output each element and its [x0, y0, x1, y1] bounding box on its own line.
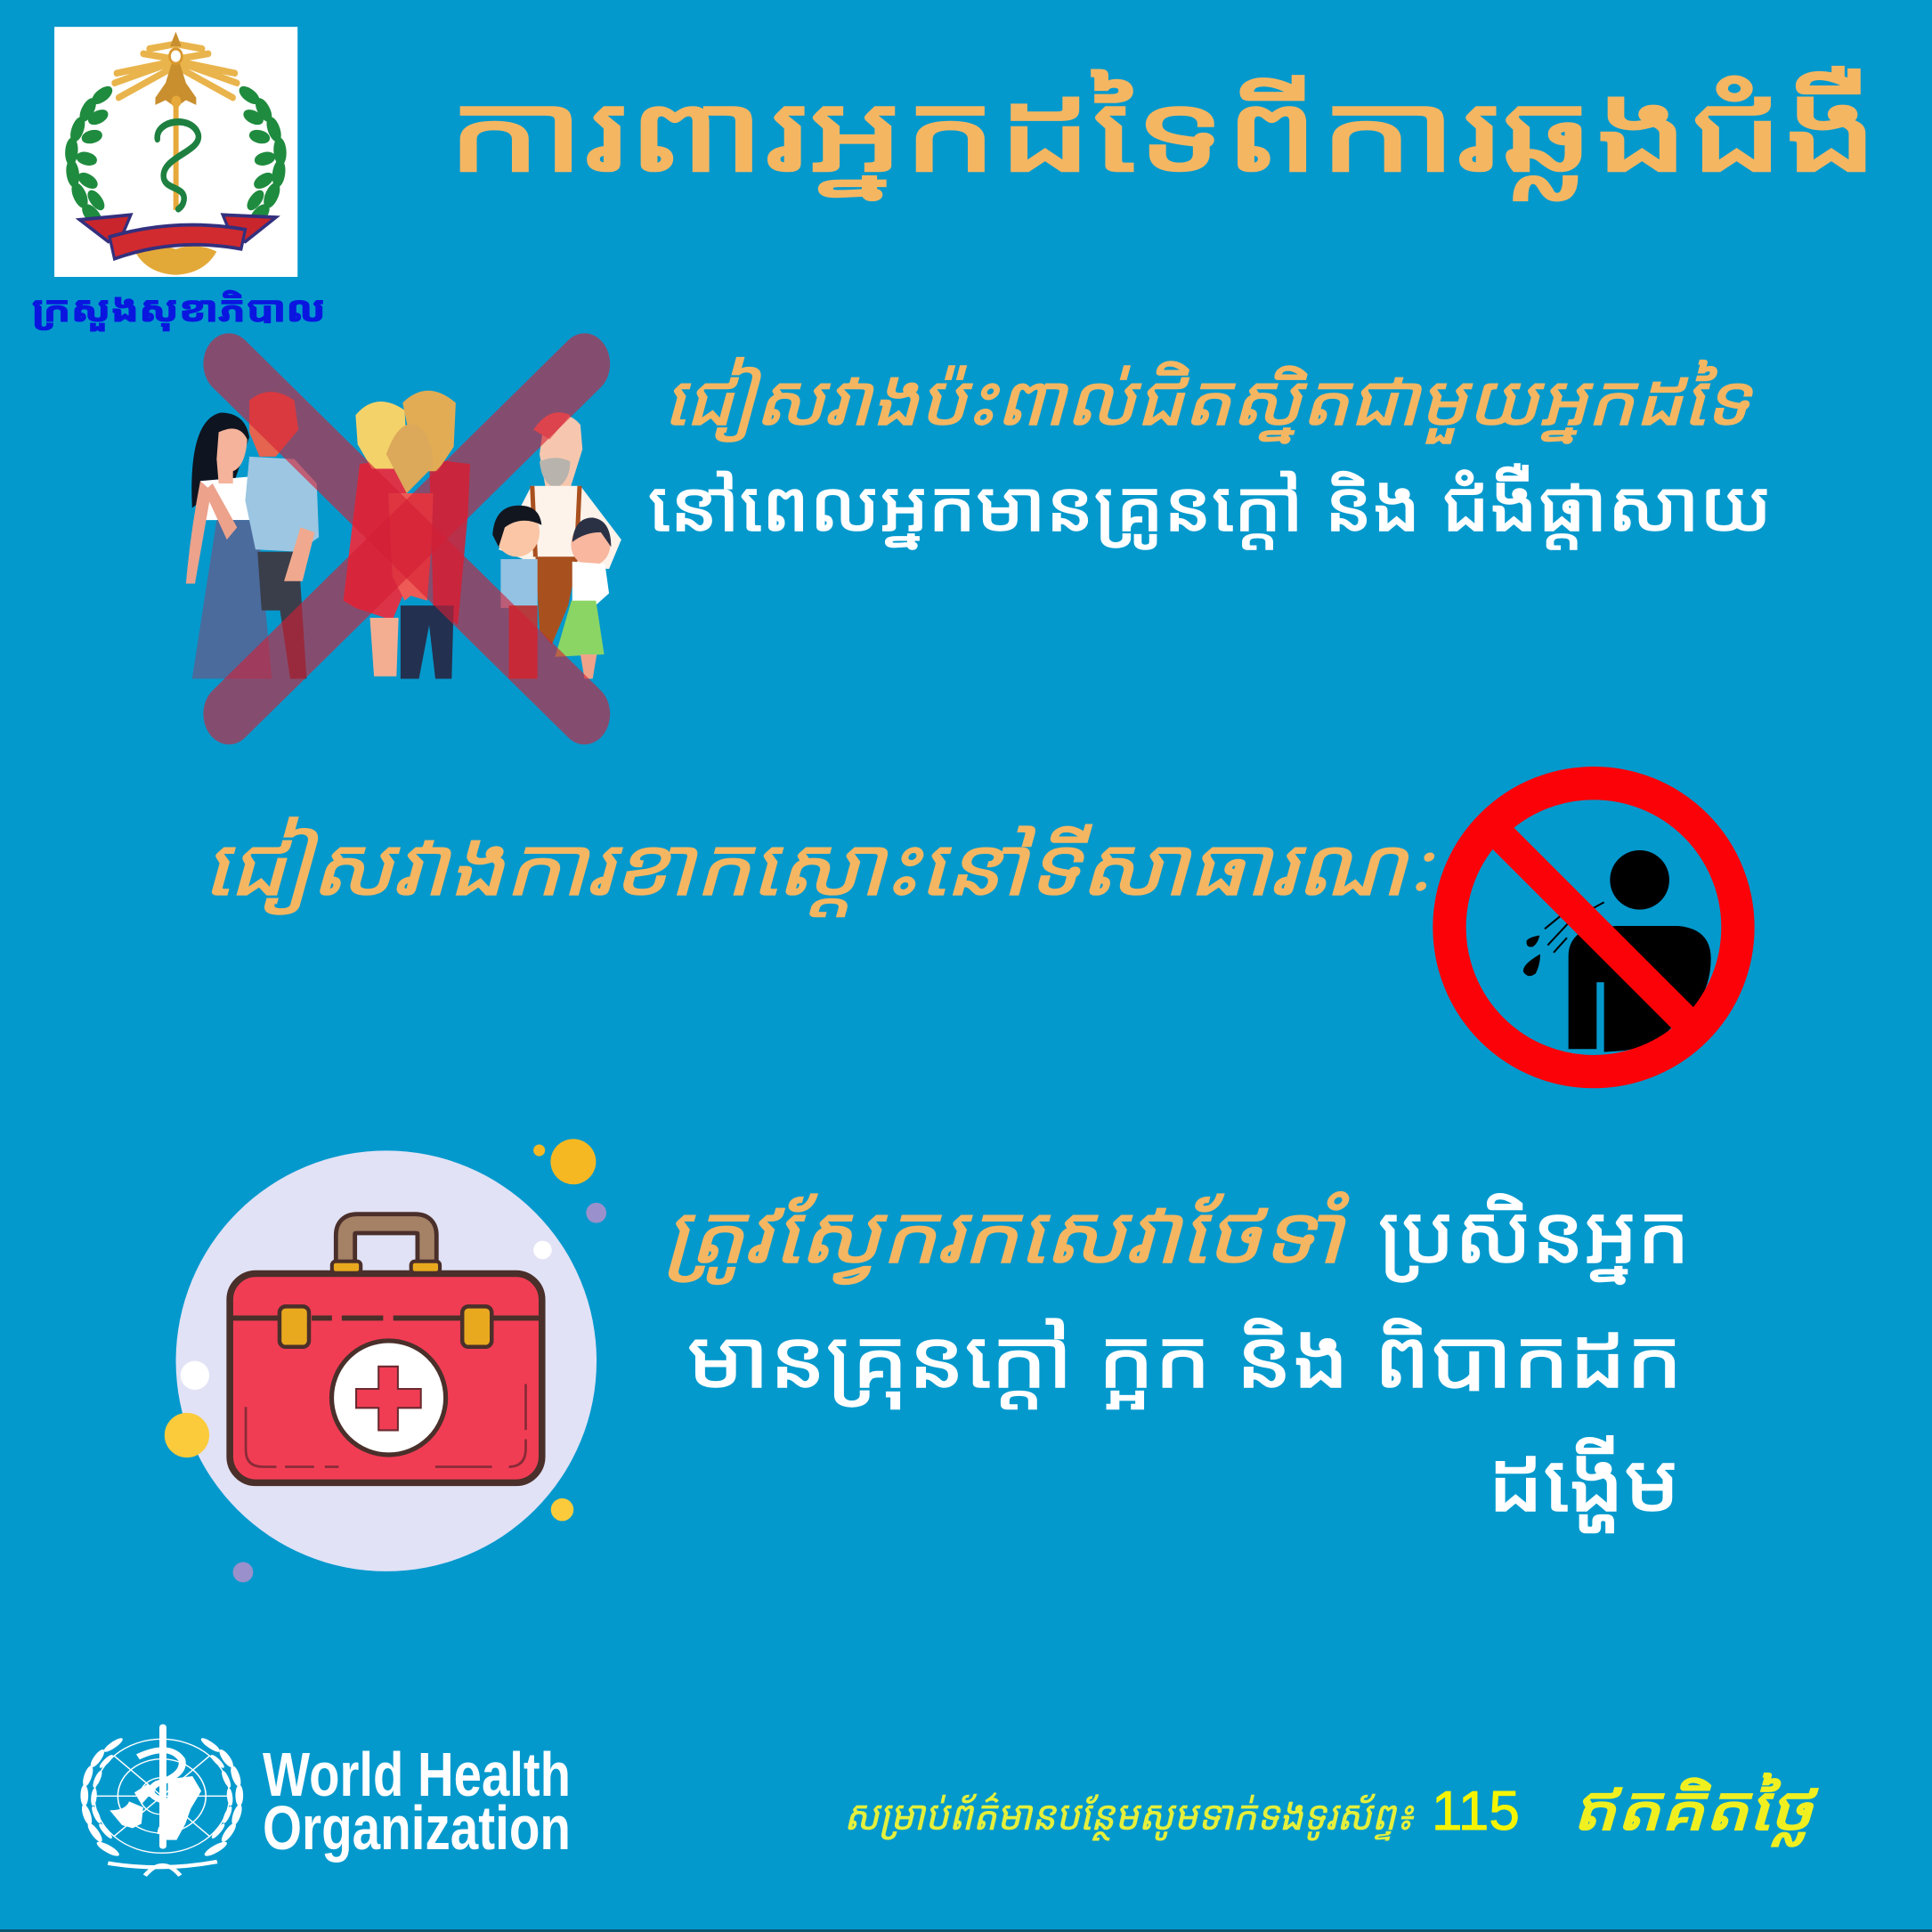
illustration: family with red cross — [186, 364, 621, 714]
footer: hotline: ឥតគិតថ្លៃ — [1572, 1773, 1818, 1847]
footer: hotline: 115 — [1432, 1781, 1520, 1842]
man in light-blue shirt — [245, 392, 319, 678]
logo text: World Health Organization: Organization — [263, 1793, 571, 1863]
staff and serpent — [159, 1725, 166, 1849]
footer: hotline — [844, 1773, 1818, 1847]
couple hugging with child — [344, 391, 470, 678]
staff — [174, 100, 179, 210]
logo: WHO emblem — [80, 1725, 244, 1876]
text: avoid close contact: ជៀសវាងប៉ះពាល់ជិតស្និតជាមួយអ្នកដទៃ — [663, 357, 1753, 444]
title: ការពារអ្នកដទៃពីការឆ្លងជំងឺ — [447, 66, 1879, 201]
text: seek care if: ប្រសិនអ្នក — [1378, 1191, 1690, 1284]
icon: first-aid kit — [165, 1139, 606, 1582]
logo: Ministry of Health emblem — [54, 27, 297, 277]
text: seek care if — [663, 1191, 1690, 1284]
woman in blue skirt — [186, 412, 272, 678]
red cross bars — [229, 364, 585, 714]
left laurel — [80, 1736, 125, 1858]
droplets — [1523, 902, 1604, 976]
prohibition ring — [1449, 783, 1738, 1072]
text: seek care if: ត្រូវស្វែករកសេវាថែទាំ — [663, 1191, 1350, 1284]
text: avoid spitting in public: ជៀសវាងការខាកស្តោះនៅទីសាធារណៈ — [203, 816, 1434, 916]
continents — [110, 1776, 201, 1840]
dots — [165, 1139, 606, 1582]
girl — [555, 517, 611, 678]
gold ornament — [135, 246, 216, 275]
logo text: World Health Organization: World Health — [263, 1740, 571, 1809]
medical cross badge — [331, 1341, 446, 1455]
text: breath: ដង្ហើម — [1488, 1435, 1680, 1532]
text: fever cough and difficulty breathing: មានគ្រុនក្តៅ ក្អក និង ពិបាកដក — [687, 1316, 1683, 1408]
sun rays — [115, 44, 237, 98]
serpent — [158, 122, 199, 209]
ribbon — [80, 215, 131, 242]
case body — [230, 1273, 542, 1482]
grandfather — [499, 412, 621, 645]
icon: no spitting sign — [1449, 783, 1738, 1072]
ministry name: ក្រសួងសុខាភិបាល — [32, 289, 326, 332]
left laurel — [66, 85, 113, 227]
boy — [492, 506, 541, 678]
right laurel — [239, 85, 286, 227]
text: when you have fever and flu: នៅពេលអ្នកមានគ្រូនក្តៅ និង ជំងឺផ្តាសាយ — [648, 464, 1772, 550]
handle — [345, 1223, 427, 1269]
footer: hotline: សម្រាប់ព័ត៌មានបន្ថែមសូមទាក់ទងទូរស័ព្ទ៖ — [844, 1791, 1415, 1841]
person — [1569, 850, 1711, 1052]
globe — [94, 1739, 230, 1853]
logo text: World Health Organization — [263, 1740, 571, 1863]
right laurel — [199, 1736, 244, 1858]
